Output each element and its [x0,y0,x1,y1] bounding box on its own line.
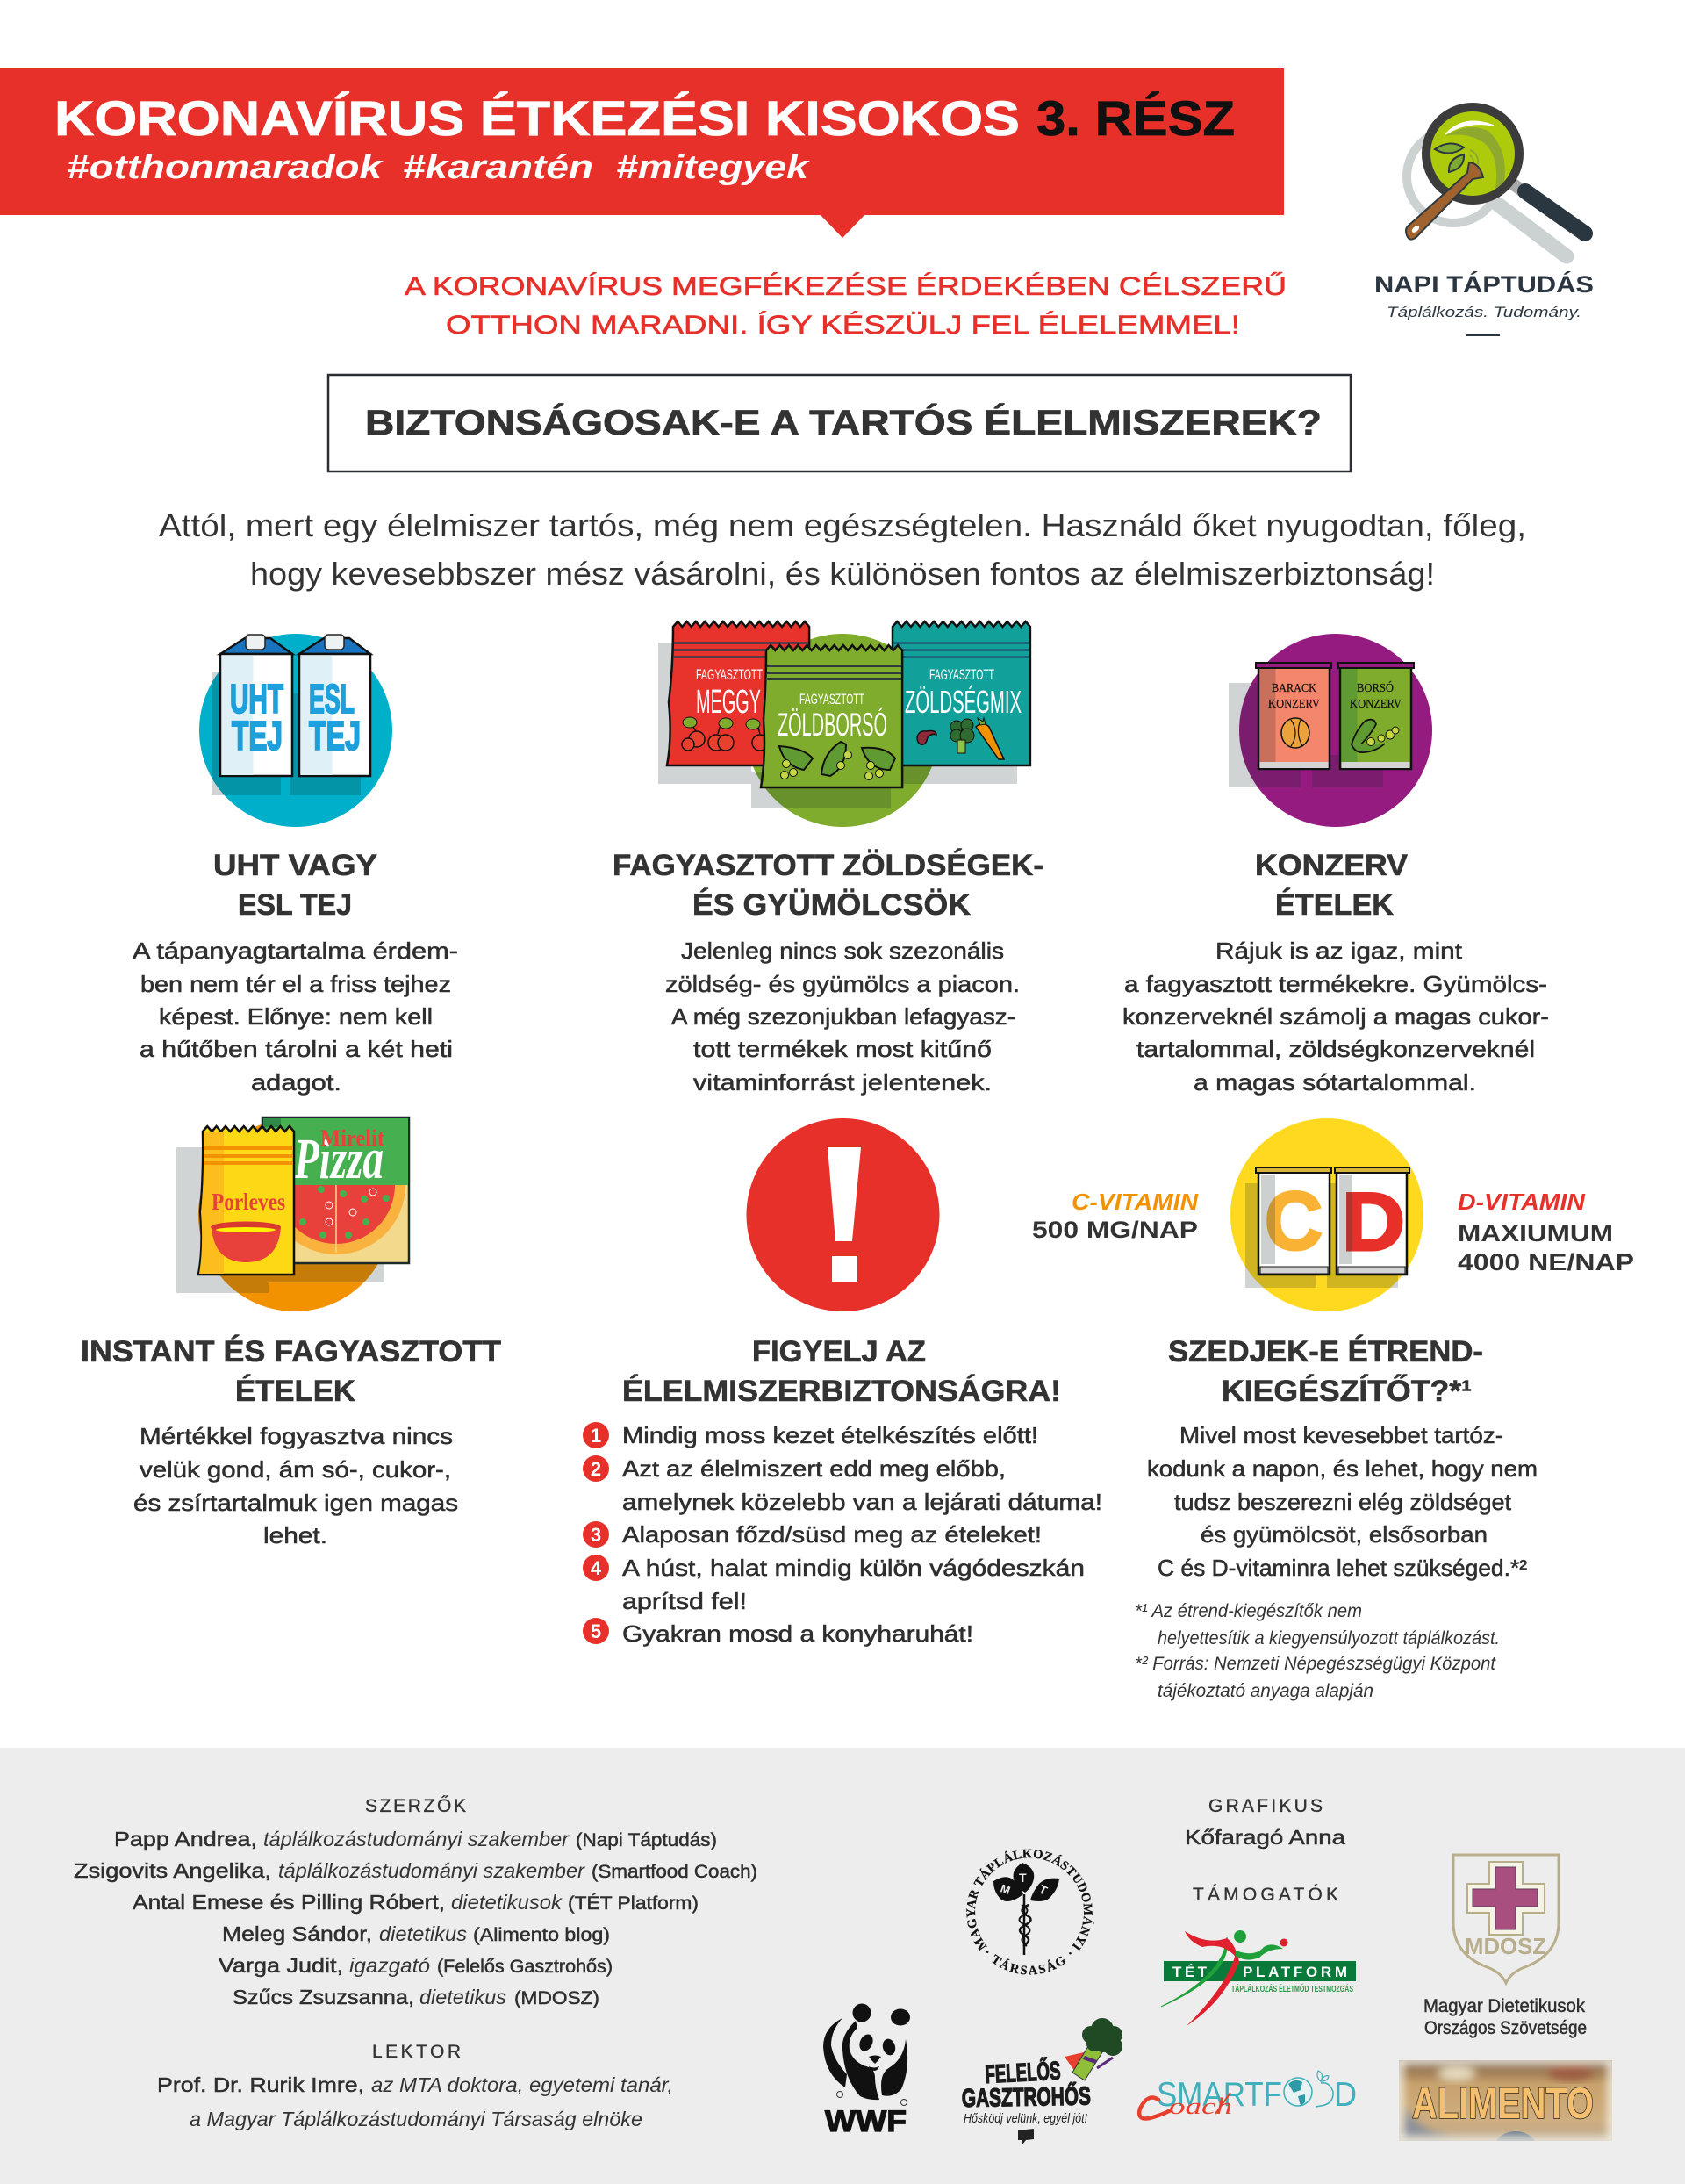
text: étrend-kiegészítő: tudsz beszerezni elég zöldséget [1174,1489,1512,1515]
authors: dietetikus [419,1986,507,2008]
logo: Magyar Táplálkozástudományi Társaság: T [1019,1871,1027,1885]
text: fagyasztott zöldségek: zöldség- és gyümölcs a piacon. [665,971,1020,997]
authors: (TÉT Platform) [568,1893,699,1914]
bag: meggy: FAGYASZTOTT [696,666,763,683]
logo: Magyar Táplálkozástudományi Társaság: MAGYAR TÁPLÁLKOZÁSTUDOMÁNYI [966,1849,1094,1951]
numbered list: food safety rules: aprítsd fel! [622,1588,747,1614]
authors: (Felelős Gasztrohős) [437,1957,613,1977]
text: instant ételek: Mértékkel fogyasztva nincs [140,1423,453,1449]
logo: Smartfood Coach: D [1334,2076,1357,2114]
reviewer: LEKTOR [372,2042,461,2062]
pizza box [262,1117,409,1263]
logo: TÉT Platform: TÁPLÁLKOZÁS ÉLETMÓD TESTMOZGÁS [1231,1983,1353,1994]
logo: TÉT Platform: TÉT [1172,1964,1208,1980]
logo: Napi Táptudás magnifier [1406,107,1585,256]
icon: vitamin C and D bottles: D [1342,1175,1405,1268]
authors: (Smartfood Coach) [592,1862,757,1882]
callout: D-vitamin dose: MAXIUMUM [1458,1220,1613,1246]
text: étrend-kiegészítő: C és D-vitaminra lehet szükséged.*² [1158,1555,1527,1581]
text: instant ételek: lehet. [263,1522,327,1548]
text: étrend-kiegészítő: kodunk a napon, és lehet, hogy nem [1147,1455,1538,1482]
numbered list: food safety rules: Gyakran mosd a konyharuhát! [622,1620,973,1647]
logo wordmark: NAPI TÁPTUDÁS [1374,270,1594,298]
logo: MDOSZ shield [1453,1855,1559,1983]
authors: igazgató [349,1954,430,1977]
logo: WWF panda: WWF [825,2105,907,2138]
authors: Papp Andrea, [114,1828,257,1850]
heading: UHT vagy ESL tej: ESL TEJ [238,888,352,922]
logo: Alimento: ALIMENTO [1412,2079,1594,2128]
graphic designer: Kőfaragó Anna [1185,1826,1345,1849]
reviewer [157,2042,673,2130]
authors: Meleg Sándor, [222,1922,372,1945]
heading: instant és fagyasztott ételek: INSTANT ÉS FAGYASZTOTT [81,1335,501,1369]
question box heading: BIZTONSÁGOSAK-E A TARTÓS ÉLELMISZEREK? [365,402,1322,442]
panel: footer credits [0,1748,1685,2184]
reviewer: a Magyar Táplálkozástudományi Társaság elnöke [190,2108,642,2130]
text: UHT tej: képest. Előnye: nem kell [159,1003,433,1030]
MDOSZ name: Magyar Dietetikusok [1423,1996,1585,2016]
intro text [159,507,1526,592]
heading: élelmiszerbiztonság: FIGYELJ AZ [752,1335,926,1369]
pizza box: Mirelit [320,1125,384,1151]
icon: canned food: KONZERV [1268,698,1320,711]
heading: élelmiszerbiztonság: ÉLELMISZERBIZTONSÁGRA! [622,1375,1061,1408]
red subheading: OTTHON MARADNI. ÍGY KÉSZÜLJ FEL ÉLELEMMEL! [446,311,1240,340]
callout: C-vitamin dose: C-VITAMIN [1072,1189,1199,1215]
heading: étrend-kiegészítő: SZEDJEK-E ÉTREND- [1168,1335,1483,1369]
icon: instant soup and frozen pizza [176,1117,409,1311]
footnotes: *² Forrás: Nemzeti Népegészségügyi Központ [1135,1654,1496,1674]
heading: UHT vagy ESL tej: UHT VAGY [213,849,377,882]
authors: dietetikusok [451,1891,563,1914]
icon: warning exclamation mark [746,1118,939,1311]
icon: canned food: BARACK [1272,682,1316,695]
logo: WWF panda [823,2003,910,2138]
authors: táplálkozástudományi szakember [278,1859,585,1882]
footnotes: tájékoztató anyaga alapján [1158,1681,1373,1701]
authors: Antal Emese és Pilling Róbert, [133,1891,445,1914]
footnotes [1135,1601,1500,1701]
graphic designer [1185,1796,1345,1849]
footnotes: helyettesítik a kiegyensúlyozott táplálkozást. [1158,1628,1500,1649]
red title banner: KORONAVÍRUS ÉTKEZÉSI KISOKOS [54,90,1020,146]
heading: élelmiszerbiztonság [622,1335,1061,1408]
bag: meggy [667,621,809,765]
reviewer: Prof. Dr. Rurik Imre, [157,2073,364,2096]
text: konzerv ételek: a fagyasztott termékekre. Gyümölcs- [1124,971,1547,997]
text: fagyasztott zöldségek: vitaminforrást jelentenek. [693,1069,992,1096]
bag: zöldségmix: ZÖLDSÉGMIX [905,684,1022,720]
authors: Szűcs Zsuzsanna, [233,1986,414,2008]
text: UHT tej: A tápanyagtartalma érdem- [133,938,458,964]
supporters label: TÁMOGATÓK [1193,1885,1338,1905]
logo: Felelős Gasztrohős: FELELŐS [985,2056,1061,2089]
numbered list: food safety rules: Azt az élelmiszert edd meg előbb, [622,1455,1006,1482]
icon: UHT and ESL milk cartons [199,634,392,827]
heading: fagyasztott zöldségek: ÉS GYÜMÖLCSÖK [692,888,971,922]
bag: zöldborsó: ZÖLDBORSÓ [778,707,887,743]
bag: zöldségmix: FAGYASZTOTT [929,666,994,683]
text: konzerv ételek: a magas sótartalommal. [1194,1069,1476,1096]
text: UHT tej [133,938,458,1096]
numbered list: food safety rules [583,1422,1102,1647]
numbered list: food safety rules: 5 [591,1620,601,1642]
callout: D-vitamin dose [1458,1189,1634,1275]
logo wordmark: Táplálkozás. Tudomány. [1387,304,1581,320]
icon: UHT and ESL milk cartons: ESL [309,676,355,722]
red title banner [0,68,1284,238]
text: étrend-kiegészítő: és gyümölcsöt, elsősorban [1201,1521,1488,1548]
bag: meggy: MEGGY [696,684,761,721]
authors: SZERZŐK [365,1796,466,1816]
heading: konzerv ételek: ÉTELEK [1275,888,1394,922]
footnotes: *¹ Az étrend-kiegészítők nem [1135,1601,1362,1621]
red title banner: #otthonmaradok [67,149,384,186]
bag: zöldségmix [893,621,1030,765]
text: UHT tej: adagot. [251,1069,341,1096]
heading: fagyasztott zöldségek [613,849,1043,922]
icon: UHT and ESL milk cartons: UHT [230,676,283,722]
logo: TÉT Platform [1161,1930,1356,2026]
logo: Felelős Gasztrohős: GASZTROHŐS [962,2080,1091,2113]
red title banner: 3. RÉSZ [1036,90,1235,146]
logo: Alimento [1399,2060,1612,2141]
numbered list: food safety rules: 1 [591,1425,601,1447]
logo: Felelős Gasztrohős [962,2018,1122,2144]
icon: vitamin C and D bottles: C [1265,1175,1323,1267]
authors: (Alimento blog) [473,1925,610,1945]
logo: TÉT Platform: PLATFORM [1243,1964,1347,1980]
heading: konzerv ételek [1255,849,1408,922]
numbered list: food safety rules: Alaposan főzd/süsd meg az ételeket! [622,1521,1042,1548]
red title banner: #mitegyek [616,149,810,186]
callout: D-vitamin dose: D-VITAMIN [1458,1189,1586,1215]
logo: Magyar Táplálkozástudományi Társaság: · TÁRSASÁG · [986,1951,1072,1975]
text: konzerv ételek: konzerveknél számolj a magas cukor- [1122,1003,1549,1030]
pizza box: Pizza [293,1127,384,1191]
text: fagyasztott zöldségek: A még szezonjukban lefagyasz- [671,1003,1015,1030]
heading: étrend-kiegészítő: KIEGÉSZÍTŐT?*¹ [1222,1375,1472,1408]
text: instant ételek [133,1423,458,1548]
icon: UHT and ESL milk cartons: TEJ [232,713,283,758]
text: instant ételek: velük gond, ám só-, cukor-, [140,1456,451,1483]
text: konzerv ételek: tartalommal, zöldségkonzerveknél [1136,1036,1535,1062]
icon: canned food [1229,634,1432,827]
red title banner: #karantén [403,149,593,186]
authors: dietetikus [379,1922,468,1945]
text: konzerv ételek [1122,938,1549,1096]
bag: zöldborsó: FAGYASZTOTT [799,691,864,708]
icon: canned food: KONZERV [1350,698,1402,711]
logo: Magyar Táplálkozástudományi Társaság: T [1037,1882,1050,1898]
question box heading [328,375,1351,471]
callout: C-vitamin dose: 500 MG/NAP [1032,1217,1198,1243]
icon: canned food: BORSÓ [1357,680,1394,695]
icon: vitamin C and D bottles [1230,1118,1423,1311]
callout: C-vitamin dose [1032,1189,1199,1243]
heading: étrend-kiegészítő [1168,1335,1483,1408]
numbered list: food safety rules: Mindig moss kezet ételkészítés előtt! [622,1422,1038,1448]
numbered list: food safety rules: 4 [591,1557,602,1579]
bag: zöldborsó [761,645,902,787]
heading: instant és fagyasztott ételek: ÉTELEK [235,1375,355,1408]
text: étrend-kiegészítő: Mivel most kevesebbet tartóz- [1180,1422,1503,1448]
soup bag [198,1126,294,1275]
authors: Zsigovits Angelika, [74,1859,271,1882]
soup bag: Porleves [212,1189,285,1215]
red subheading: A KORONAVÍRUS MEGFÉKEZÉSE ÉRDEKÉBEN CÉLSZERŰ [405,272,1287,301]
reviewer: az MTA doktora, egyetemi tanár, [371,2073,673,2096]
text: instant ételek: és zsírtartalmuk igen magas [133,1490,458,1516]
logo: Smartfood Coach: oach [1169,2094,1232,2119]
callout: D-vitamin dose: 4000 NE/NAP [1458,1249,1634,1275]
text: konzerv ételek: Rájuk is az igaz, mint [1215,938,1463,964]
icon: frozen vegetable bags [658,621,1030,827]
text: UHT tej: a hűtőben tárolni a két heti [140,1036,453,1062]
numbered list: food safety rules: A húst, halat mindig külön vágódeszkán [622,1555,1085,1581]
heading: fagyasztott zöldségek: FAGYASZTOTT ZÖLDSÉGEK- [613,849,1043,882]
authors: Varga Judit, [219,1954,343,1977]
authors: táplálkozástudományi szakember [263,1828,570,1850]
logo: Felelős Gasztrohős: Hősködj velünk, egyél jót! [964,2111,1088,2126]
text: fagyasztott zöldségek: tott termékek most kitűnő [693,1036,992,1062]
text: UHT tej: ben nem tér el a friss tejhez [140,971,451,997]
text: fagyasztott zöldségek: Jelenleg nincs sok szezonális [681,938,1004,964]
numbered list: food safety rules: amelynek közelebb van a lejárati dátuma! [622,1489,1102,1515]
numbered list: food safety rules: 3 [591,1524,601,1546]
authors: (MDOSZ) [514,1988,599,2008]
numbered list: food safety rules: 2 [591,1458,601,1480]
intro text: hogy kevesebbszer mész vásárolni, és különösen fontos az élelmiszerbiztonság! [250,556,1435,592]
logo: Magyar Táplálkozástudományi Társaság: M [999,1881,1012,1897]
icon: UHT and ESL milk cartons: TEJ [309,713,361,758]
graphic designer: GRAFIKUS [1208,1796,1323,1816]
heading: instant és fagyasztott ételek [81,1335,501,1408]
MDOSZ name [1423,1996,1587,2038]
red subheading [405,272,1287,340]
logo: MDOSZ shield: MDOSZ [1465,1933,1546,1959]
heading: konzerv ételek: KONZERV [1255,849,1408,882]
heading: UHT vagy ESL tej [213,849,377,922]
logo: Smartfood Coach [1139,2071,1357,2119]
MDOSZ name: Országos Szövetsége [1424,2018,1587,2038]
authors: (Napi Táptudás) [576,1830,717,1850]
text: étrend-kiegészítő [1147,1422,1538,1581]
logo: Smartfood Coach: SMARTF [1157,2076,1282,2114]
text: fagyasztott zöldségek [665,938,1020,1096]
logo wordmark [1374,270,1594,336]
authors [74,1796,757,2008]
intro text: Attól, mert egy élelmiszer tartós, még nem egészségtelen. Használd őket nyugodtan, főleg, [159,507,1526,543]
